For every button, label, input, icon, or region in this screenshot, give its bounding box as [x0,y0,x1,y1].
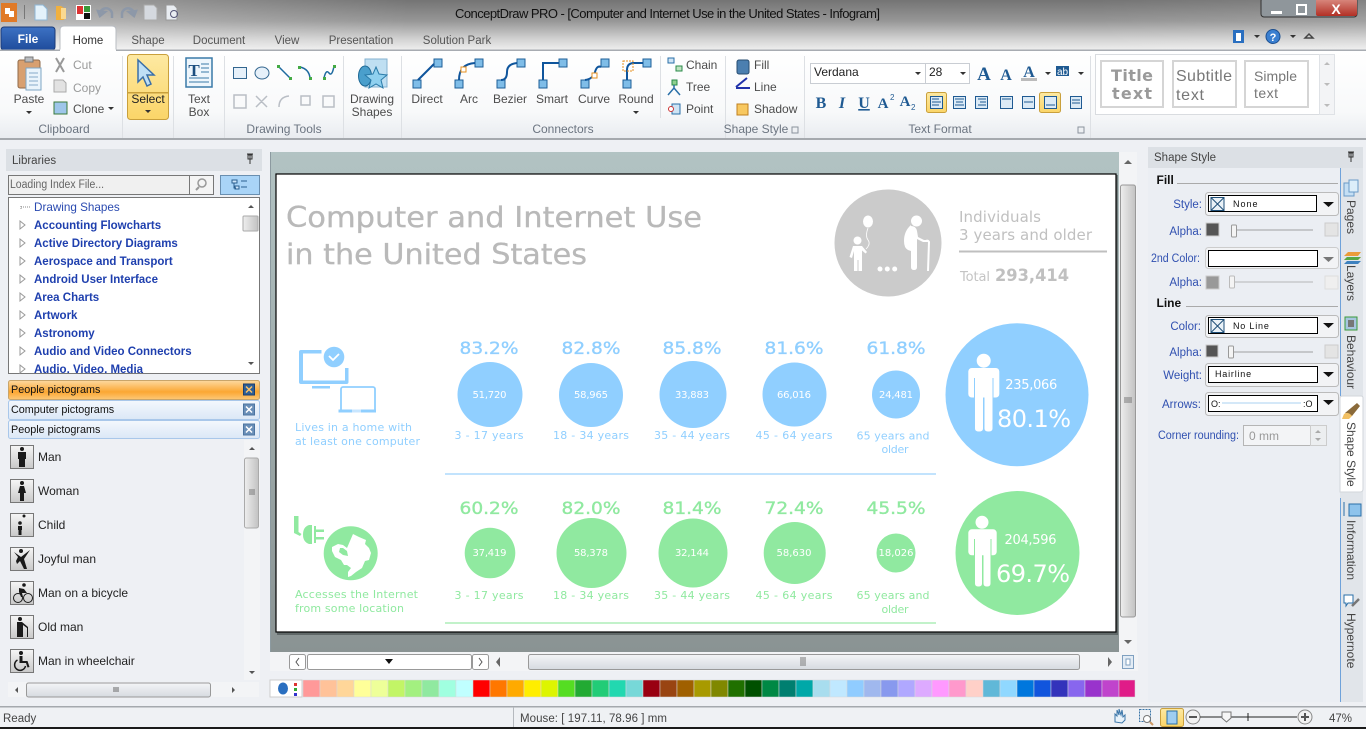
text box button [186,58,212,119]
icon: plug and globe [294,516,378,580]
computer 65 years and older [856,339,930,456]
clipboard group: Clipboard [38,122,90,136]
text format group: Text Format [908,122,972,136]
computer 35-44 years [654,339,730,442]
text style gallery: text [1112,84,1152,103]
computer 3-17 years: 83.2% [460,339,518,359]
library tree list: Android User Interface [34,274,158,286]
fill section: Alpha: [1169,277,1202,289]
shape style group: Shadow [754,102,798,116]
text style gallery: Title [1111,66,1153,85]
individuals label [959,208,1093,244]
clipboard group: Copy [73,81,101,95]
internet 18-34 years: 82.0% [562,499,620,519]
internet row caption: Accesses the Internet [295,588,419,601]
internet 3-17 years: 3 - 17 years [454,589,524,602]
computer total circle: 80.1% [997,405,1071,433]
line section: Weight: [1163,370,1202,382]
individuals label: Individuals [959,208,1041,226]
horizontal navigation bar [270,652,1138,671]
internet 65 years and older: 18,026 [878,548,914,559]
computer 65 years and older: 61.8% [866,339,926,359]
shape style group: Fill [754,58,769,72]
text format group: B [816,95,827,112]
pictogram list: Man [38,450,61,464]
line section: Arrows: [1162,399,1201,411]
line section: O: [1211,399,1221,409]
ribbon tabs: ? [1270,32,1277,44]
shape style group: Line [754,80,777,94]
ribbon tabs: Home [73,35,103,47]
internet 3-17 years: 37,419 [472,548,506,559]
select button [128,54,168,120]
line section: No Line [1233,321,1270,331]
computer 65 years and older: 65 years and [856,430,930,442]
text style gallery: Subtitle [1176,68,1232,85]
clipboard group: Clone [73,102,105,116]
computer 35-44 years: 33,883 [675,390,709,401]
computer 18-34 years: 18 - 34 years [553,429,629,442]
icon: computer and laptop [299,347,376,412]
internet total circle: 204,596 [1004,533,1056,548]
zoom controls [1115,708,1352,726]
text box button: Box [189,105,209,119]
library tree list: Active Directory Diagrams [34,238,178,250]
fill section: Style: [1173,199,1202,211]
ribbon panel [0,50,1366,140]
internet total circle: 69.7% [996,560,1070,588]
internet 3-17 years: 60.2% [460,499,518,519]
line section: Line [1156,296,1181,310]
internet 3-17 years [454,499,524,602]
computer 3-17 years [454,339,524,442]
internet 35-44 years [654,499,730,602]
internet 45-64 years: 45 - 64 years [756,589,833,602]
line section: Hairline [1215,369,1252,379]
side tabs: Information [1344,520,1358,580]
internet 35-44 years: 35 - 44 years [654,589,730,602]
internet 35-44 years: 81.4% [662,499,722,519]
text style gallery: text [1254,85,1278,101]
shape style group: Shape Style [724,122,789,136]
connectors group: Round [618,92,654,106]
computer 3-17 years: 3 - 17 years [454,429,524,442]
text style gallery [1096,54,1334,114]
shape style group [724,58,798,136]
fill section: Fill [1156,173,1174,187]
clipboard group: Cut [73,58,92,72]
select button: Select [131,92,165,106]
text format group: I [838,95,846,112]
panel: individuals summary [834,190,1107,296]
line section: :O [1303,399,1313,409]
panel: shape style: Shape Style [1154,152,1216,164]
title bar [0,0,1366,52]
text format group: 2 [890,93,895,102]
text style gallery: text [1176,87,1205,104]
text style gallery: Simple [1254,68,1297,84]
drawing shapes button: Drawing [350,92,394,106]
total: 293,414 [995,266,1069,286]
panel: libraries [6,149,262,697]
computer 45-64 years: 66,016 [777,390,811,401]
drawing shapes button: Shapes [352,105,392,119]
connectors group: Arc [460,92,478,106]
internet row caption: from some location [295,602,404,615]
connectors group: Direct [411,92,443,106]
computer 65 years and older: older [882,443,909,456]
text format group [810,64,1084,136]
colour palette [270,680,1135,697]
text box button: T [188,61,200,80]
library tabs [8,380,260,438]
computer 3-17 years: 51,720 [472,390,506,401]
fill section: Alpha: [1169,226,1202,238]
line section: 0 mm [1249,429,1279,443]
window title: ConceptDraw PRO - [Computer and Internet Use in the United States - Infogram] [455,6,880,21]
individuals label: 3 years and older [959,226,1093,244]
line section [1156,296,1338,446]
internet 35-44 years: 32,144 [675,548,709,559]
side tabs: Shape Style [1344,422,1358,487]
side tabs: Hypernote [1344,613,1358,669]
chain tree point buttons: Tree [686,80,711,94]
side tabs: Pages [1344,200,1358,234]
computer total circle [946,323,1088,466]
pictogram list: Joyful man [38,552,96,566]
text format group: Verdana [814,65,859,79]
line section: Color: [1170,321,1201,333]
library tree list: Artwork [34,310,78,322]
library tree list: Accounting Flowcharts [34,220,161,232]
internet 65 years and older [856,499,930,616]
panel: libraries: Libraries [12,155,56,167]
computer row caption: at least one computer [295,435,420,448]
icon: man [968,354,999,432]
internet 65 years and older: older [882,603,909,616]
computer row caption: Lives in a home with [295,421,412,434]
connectors group: Curve [578,92,610,106]
pictogram list: Man in wheelchair [38,654,135,668]
internet 65 years and older: 65 years and [856,589,930,602]
ribbon tabs: Presentation [329,35,393,47]
vertical scrollbar [1119,152,1137,652]
pictogram list: Man on a bicycle [38,586,128,600]
search box [8,176,260,194]
internet 45-64 years: 58,630 [776,548,812,559]
computer 45-64 years: 45 - 64 years [756,429,833,442]
fill section: None [1233,199,1259,209]
fill section [1151,173,1338,289]
text format group: A [900,94,911,110]
canvas workspace [270,152,1138,671]
computer 65 years and older: 24,481 [879,390,913,401]
pictogram list [8,440,260,697]
text format group: A [1000,67,1012,84]
total: Total [959,270,990,285]
connectors group: Smart [536,92,569,106]
pictogram list: Old man [38,620,83,634]
infographic page [276,174,1118,635]
text format group: A [977,64,991,85]
internet row caption [295,588,419,615]
clipboard group: Paste [14,92,45,106]
total [959,266,1069,286]
chain tree point buttons: Chain [686,58,717,72]
internet total circle [956,491,1080,615]
computer 45-64 years [756,339,833,442]
ribbon tabs: Shape [131,35,165,47]
chain tree point buttons [660,56,717,118]
library tree list: Audio, Video, Media [34,364,144,376]
window controls: X [1331,1,1341,17]
side tabs [1340,168,1363,702]
status bar [0,706,1366,729]
ribbon tabs: Solution Park [423,35,491,47]
computer 35-44 years: 85.8% [662,339,722,359]
text format group: 28 [929,65,943,79]
library tree list: Aerospace and Transport [34,256,173,268]
connectors group: Bezier [493,92,527,106]
icon: child and old man in grey circle [834,190,942,296]
zoom controls: 47% [1329,713,1352,725]
drawing tools group: Drawing Tools [246,122,322,136]
internet 65 years and older: 45.5% [866,499,926,519]
text format group: 2 [911,103,916,112]
ribbon tabs: View [275,35,300,47]
pictogram list: Child [38,518,65,532]
line section: Alpha: [1169,347,1202,359]
title: Computer and Internet Use [286,201,702,234]
internet 18-34 years [553,499,629,602]
internet 18-34 years: 58,378 [574,548,608,559]
text box button: Text [188,92,211,106]
computer total circle: 235,066 [1005,378,1057,393]
library tree list: Area Charts [34,292,99,304]
library tree list: Astronomy [34,328,95,340]
ribbon tabs: File [18,32,39,46]
panel: internet row [294,491,1080,624]
internet 45-64 years [756,499,833,602]
clipboard group [14,57,114,136]
computer row caption [295,421,420,448]
text format group: A [1023,64,1035,81]
computer 18-34 years: 58,965 [574,390,608,401]
title: in the United States [286,238,587,271]
library tabs: Computer pictograms [11,404,115,416]
connectors group [411,59,654,136]
library tabs: People pictograms [11,384,101,396]
library tabs: People pictograms [11,424,101,436]
ribbon tabs [1,26,1313,51]
text format group: A [878,96,889,112]
connectors group: Connectors [532,122,594,136]
pictogram list: Woman [38,484,79,498]
drawing tools group [234,65,336,136]
line section: Corner rounding: [1158,430,1239,442]
chain tree point buttons: Point [686,102,714,116]
library tree list: Drawing Shapes [34,201,120,214]
side tabs: Behaviour [1344,335,1358,389]
computer 18-34 years [553,339,629,442]
internet 18-34 years: 18 - 34 years [553,589,629,602]
computer 18-34 years: 82.8% [562,339,620,359]
text format group: ab [1057,67,1068,78]
status bar: Ready [3,713,36,725]
panel: shape style [1148,147,1363,702]
computer 35-44 years: 35 - 44 years [654,429,730,442]
panel: computer row [295,323,1088,475]
text format group: U [858,95,870,112]
computer 45-64 years: 81.6% [764,339,824,359]
library tree list: Audio and Video Connectors [34,346,192,358]
side tabs: Layers [1344,265,1358,301]
internet 45-64 years: 72.4% [764,499,824,519]
ribbon tabs: Document [193,35,246,47]
fill section: 2nd Color: [1151,253,1200,265]
title [286,201,702,271]
icon: man [968,516,997,586]
window controls [1261,0,1357,17]
status bar: Mouse: [ 197.11, 78.96 ] mm [520,713,667,725]
search box: Loading Index File... [10,179,104,191]
drawing shapes button [350,59,394,119]
library tree list [8,198,260,380]
